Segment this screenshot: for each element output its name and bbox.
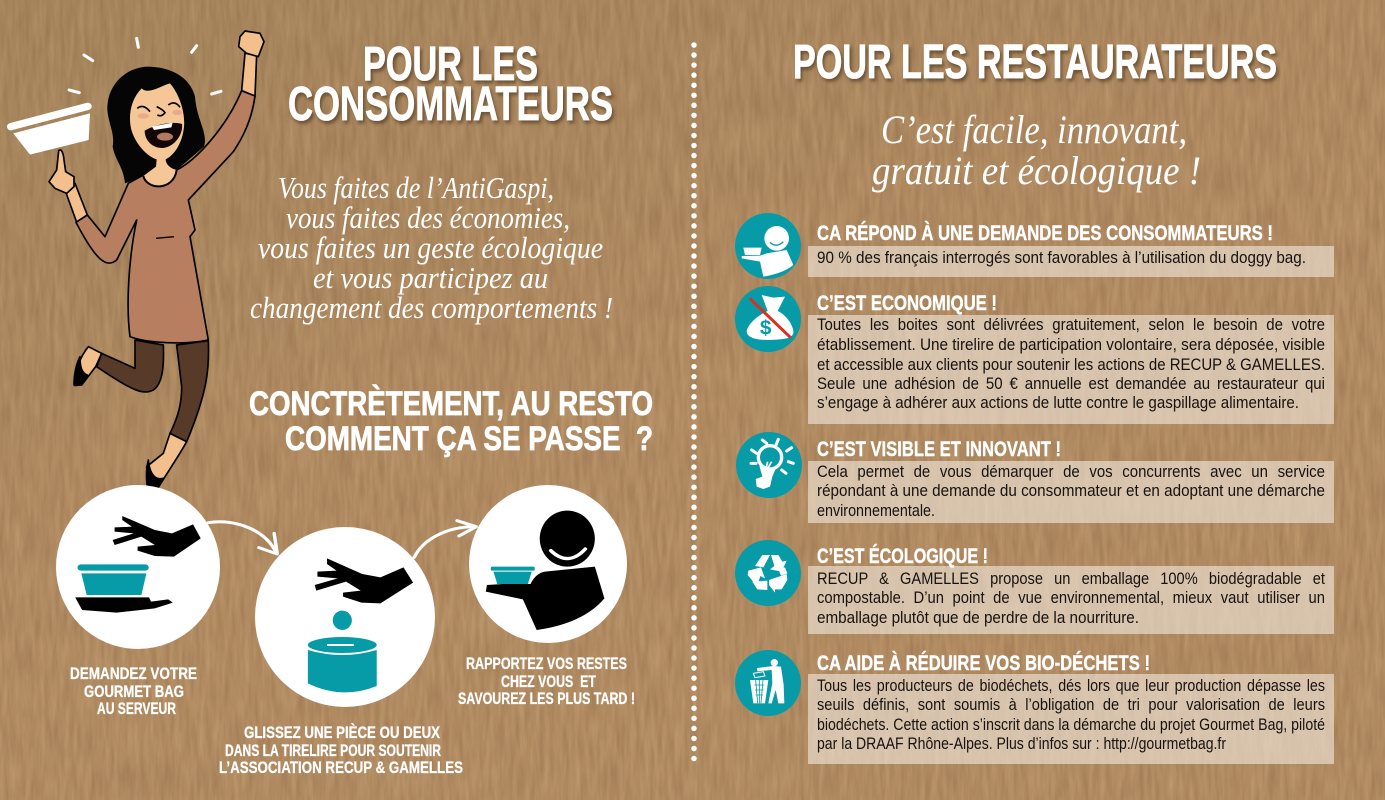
script text: consumers: vous faites un geste écologique [258, 230, 603, 265]
script text: consumers [250, 170, 613, 325]
heading: pour les consommateurs: CONSOMMATEURS [288, 78, 613, 131]
icon: light bulb [736, 432, 802, 498]
panel: economique: Seule une adhésion de 50 € annuelle est demandée au restaurateur qui [817, 375, 1325, 393]
caption: step 1: AU SERVEUR [97, 699, 176, 718]
hair [107, 67, 205, 183]
panel: economique: C’EST ECONOMIQUE ! [817, 292, 997, 315]
caption: step 3: RAPPORTEZ VOS RESTES [466, 654, 627, 673]
icon: hand over bowl [75, 516, 201, 613]
panel: demande des consommateurs [735, 213, 1334, 279]
icon: recycling arrows [735, 540, 801, 606]
panel: bio-dechets: par la DRAAF Rhône-Alpes. Plus d’infos sur : http://gourmetbag.fr [817, 735, 1226, 753]
script text: consumers: et vous participez au [313, 260, 548, 295]
illustration: jumping woman holding a bowl [11, 31, 264, 493]
caption: step 2: DANS LA TIRELIRE POUR SOUTENIR [225, 741, 441, 760]
script text: restaurateurs: gratuit et écologique ! [872, 148, 1201, 193]
panel: ecologique [735, 540, 1334, 634]
script text: restaurateurs [872, 107, 1201, 193]
dress [76, 91, 255, 343]
icon: hand over coin jar [308, 558, 413, 692]
legs [74, 340, 209, 493]
panel: ecologique: C’EST ÉCOLOGIQUE ! [817, 545, 988, 568]
caption: step 3: CHEZ VOUS ET [501, 672, 596, 691]
panel: visible et innovant: environnementale. [817, 502, 935, 520]
caption: step 1 [70, 664, 197, 718]
panel: visible et innovant: C’EST VISIBLE ET INNOVANT ! [817, 438, 1061, 461]
step icons and arrows [75, 511, 604, 692]
script text: consumers: changement des comportements ! [250, 290, 613, 325]
panel: economique [735, 286, 1334, 424]
panel: economique: et accessible aux clients pour soutenir les actions de RECUP & GAMELLES. [817, 356, 1325, 374]
caption: step 3 [458, 654, 635, 708]
icon: person with bowl [735, 213, 801, 279]
panel: ecologique: emballage plutôt que de perdre de la nourriture. [817, 609, 1139, 627]
caption: step 2: GLISSEZ UNE PIÈCE OU DEUX [244, 723, 441, 742]
panel: bio-dechets: seuils définis, sont soumis à l’obligation de tri pour valorisation de leurs [817, 696, 1325, 714]
icon: person using trash bin [735, 650, 801, 716]
caption: step 1: GOURMET BAG [84, 682, 184, 701]
caption: step 2: L’ASSOCIATION RECUP & GAMELLES [219, 758, 463, 777]
arrow: step 2 to 3 [414, 521, 476, 557]
script text: consumers: Vous faites de l’AntiGaspi, [278, 170, 554, 205]
arms skin [49, 31, 264, 222]
laughing mouth [145, 123, 182, 148]
panel: visible et innovant: Cela permet de vous démarquer de vos concurrents avec un service [817, 463, 1325, 481]
panel: demande des consommateurs: 90 % des français interrogés sont favorables à l’utilisation du doggy bag. [817, 249, 1306, 267]
step circle 1 [56, 485, 220, 649]
step circle 2 [255, 527, 435, 707]
subheading: concretement [249, 385, 653, 458]
panel: visible et innovant: répondant à une demande du consommateur et en adoptant une démarche [817, 482, 1325, 500]
panel: economique: Toutes les boites sont délivrées gratuitement, selon le besoin de votre [817, 316, 1325, 334]
panel: ecologique: RECUP & GAMELLES propose un emballage 100% biodégradable et [817, 570, 1325, 588]
subheading: concretement: CONCTRÈTEMENT, AU RESTO [249, 385, 653, 423]
script text: restaurateurs: C’est facile, innovant, [881, 107, 1187, 152]
panel: economique: s’engage à adhérer aux actions de lutte contre le gaspillage alimentaire. [817, 394, 1299, 412]
panel: demande des consommateurs: CA RÉPOND À UNE DEMANDE DES CONSOMMATEURS ! [817, 222, 1273, 245]
step circle 3 [469, 485, 627, 643]
caption: step 2 [219, 723, 463, 777]
arrow: step 1 to 2 [208, 522, 277, 554]
panel: visible et innovant [736, 432, 1334, 523]
face [130, 83, 184, 186]
icon: money bag crossed: $ [760, 316, 772, 339]
icon: white bowl [11, 38, 221, 155]
icon: money bag crossed [735, 286, 801, 352]
caption: step 1: DEMANDEZ VOTRE [70, 664, 197, 683]
panel: bio-dechets [735, 650, 1334, 764]
icon: smiling person with bowl [486, 511, 604, 630]
panel: ecologique: compostable. D’un point de vue environnemental, mieux vaut utiliser un [817, 589, 1325, 607]
panel: bio-dechets: CA AIDE À RÉDUIRE VOS BIO-DÉCHETS ! [817, 652, 1150, 675]
caption: step 3: SAVOUREZ LES PLUS TARD ! [458, 689, 635, 708]
dotted divider [691, 45, 697, 760]
subheading: concretement: COMMENT ÇA SE PASSE ? [285, 420, 653, 458]
heading: pour les consommateurs: POUR LES [363, 38, 538, 91]
script text: consumers: vous faites des économies, [286, 200, 570, 235]
heading: pour les consommateurs [288, 38, 613, 131]
panel: economique: établissement. Une tirelire de participation volontaire, sera déposée, visible [817, 336, 1325, 354]
